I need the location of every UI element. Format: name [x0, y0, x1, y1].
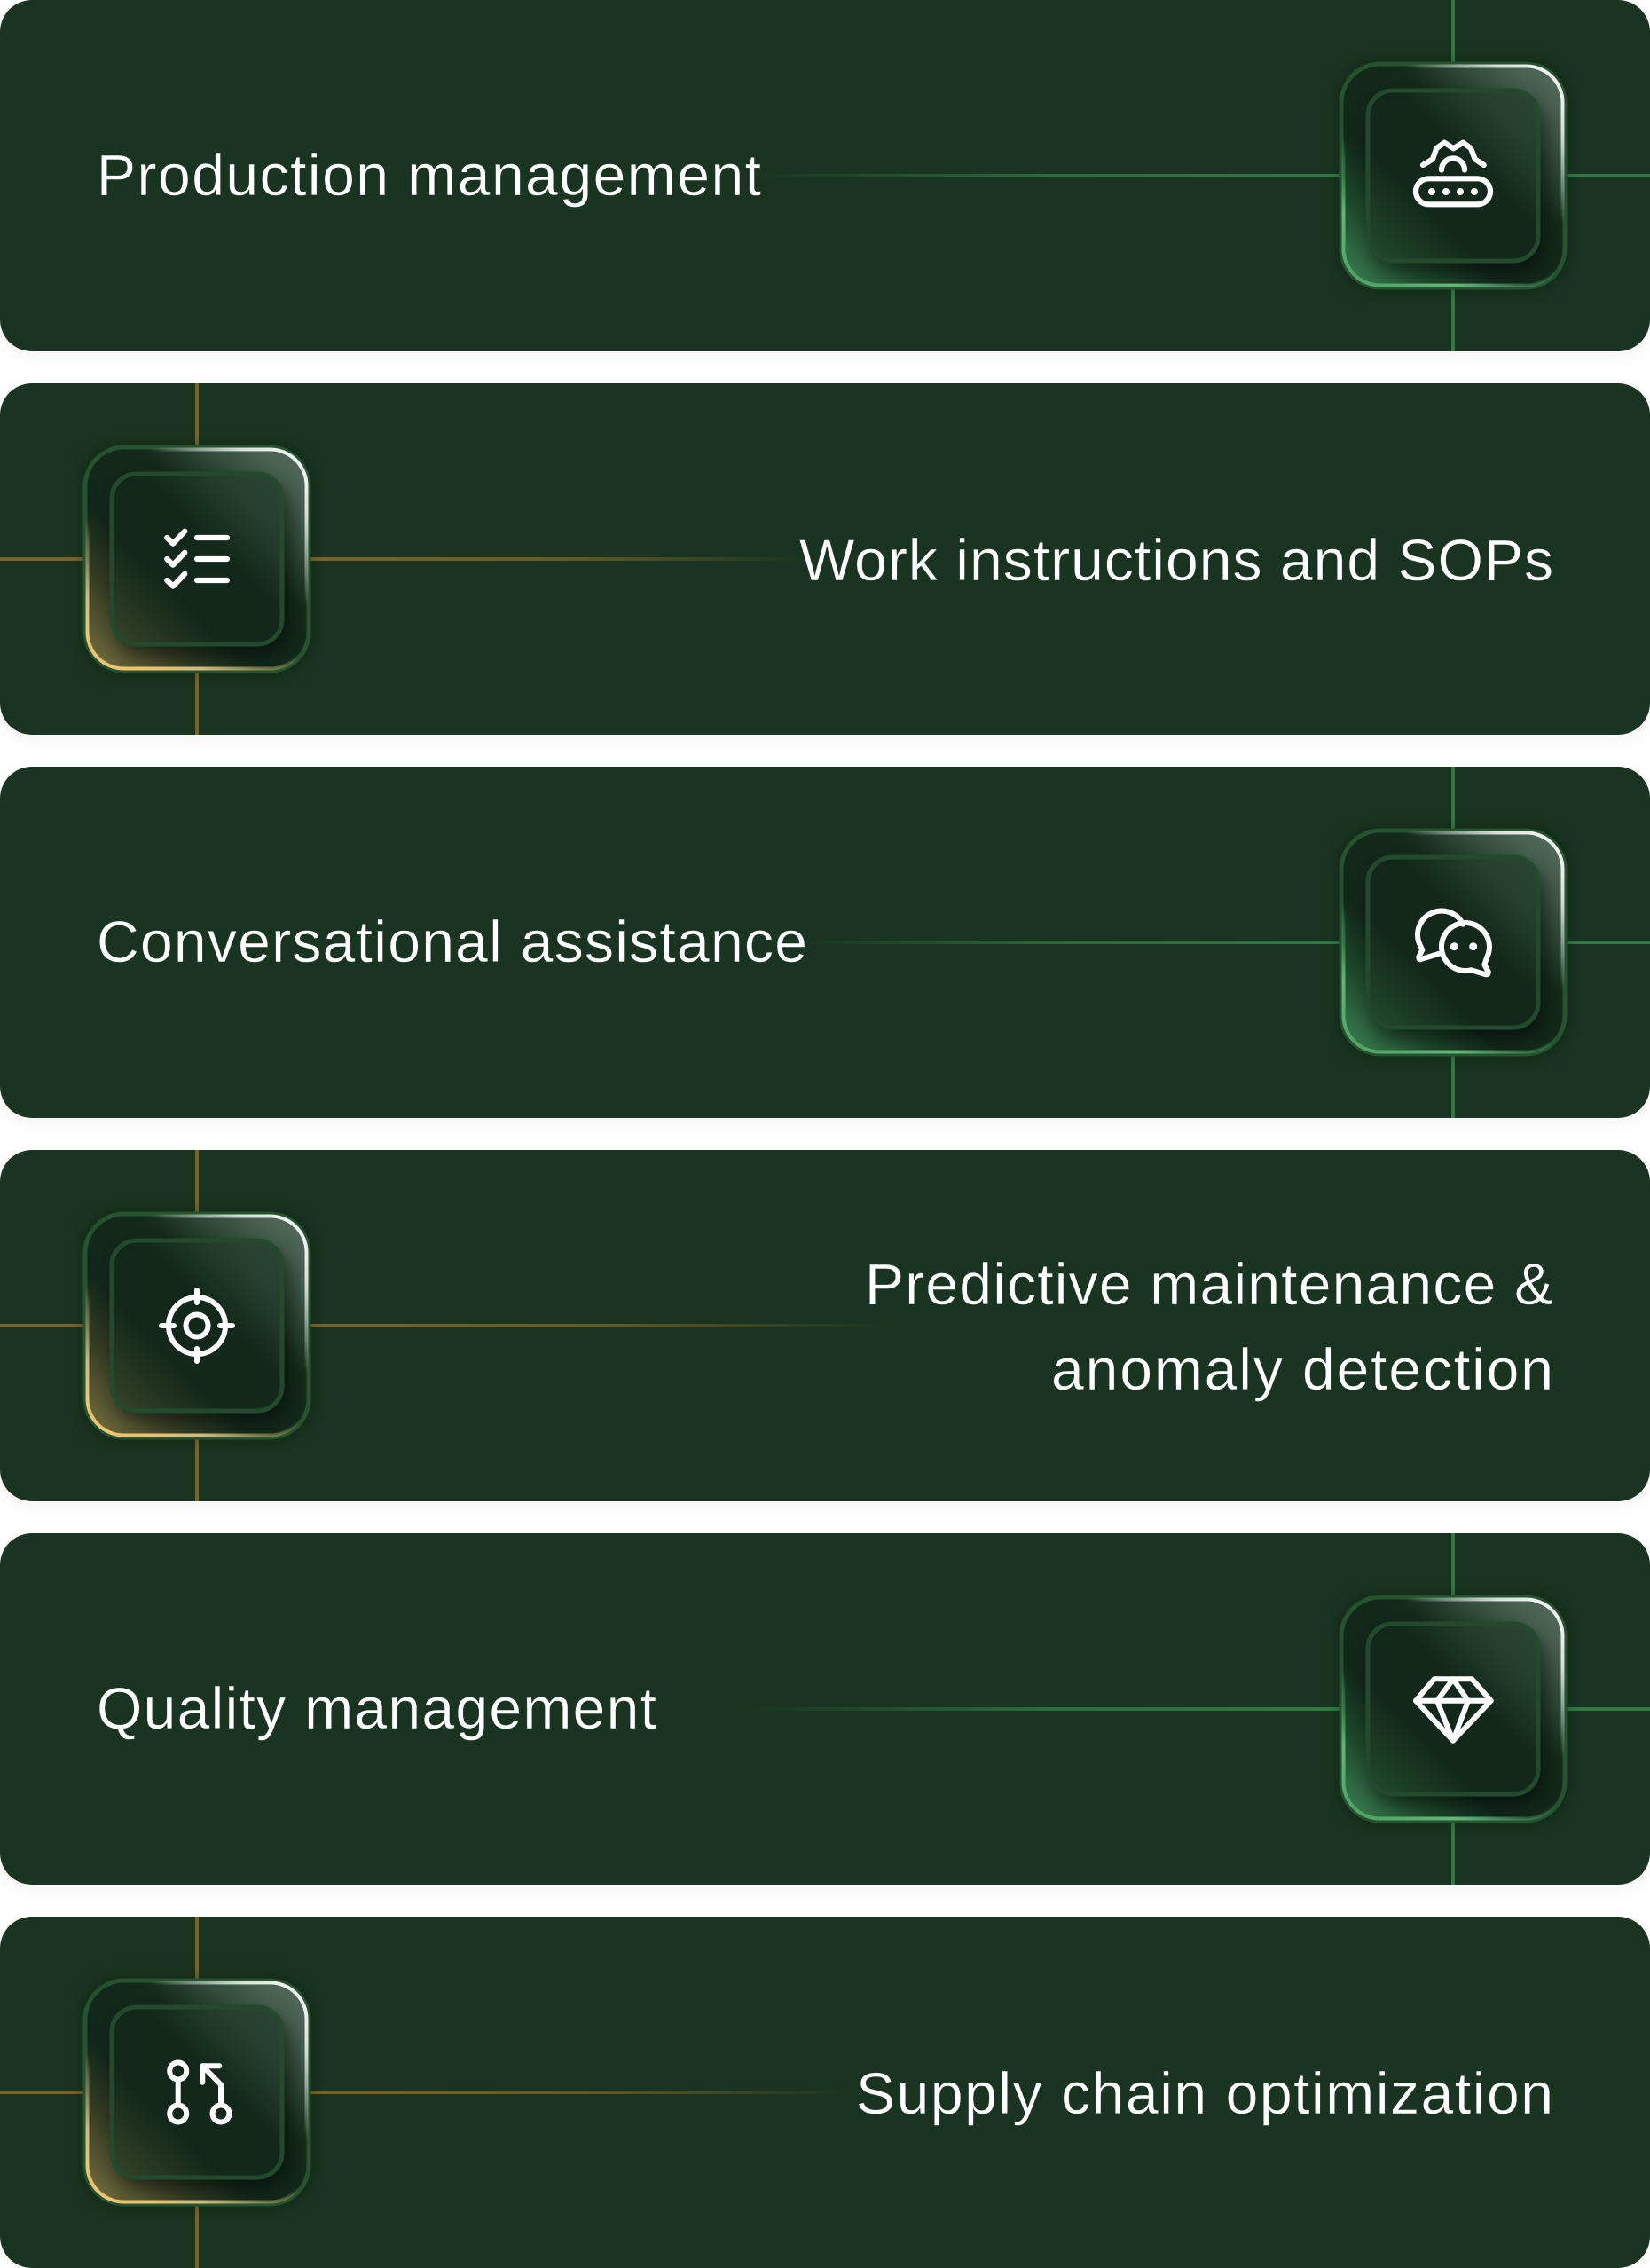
panel: work instructions and SOPs: [0, 383, 1650, 738]
heading: supply chain optimization: Supply chain optimization: [856, 2060, 1553, 2126]
heading: production management: Production management: [97, 142, 761, 208]
heading: conversational assistance: Conversational assistance: [97, 909, 807, 974]
connector lines: [798, 767, 1650, 1118]
glass icon tile: [83, 1979, 310, 2206]
connector lines: [0, 1917, 852, 2268]
connector lines: [745, 0, 1650, 351]
icon: conveyor belt with gear: [1416, 143, 1490, 204]
panel: production management: [0, 0, 1650, 355]
heading: quality management: Quality management: [97, 1675, 656, 1741]
connector lines: [745, 1533, 1650, 1885]
glass icon tile: [1340, 62, 1567, 289]
heading: work instructions and SOPs: Work instructions and SOPs: [799, 527, 1553, 593]
panel: quality management: [0, 1533, 1650, 1888]
icon: target crosshair: [161, 1290, 232, 1361]
heading: predictive maintenance and anomaly detection: anomaly detection: [1051, 1336, 1553, 1402]
glass icon tile: [1340, 1595, 1567, 1823]
connector lines: [0, 383, 807, 735]
panel: supply chain optimization: [0, 1917, 1650, 2268]
panel: conversational assistance: [0, 767, 1650, 1122]
glass icon tile: [83, 445, 310, 673]
icon: chat bubbles: [1418, 911, 1489, 974]
connector lines: [0, 1150, 887, 1501]
icon: checklist: [167, 532, 227, 587]
panel: predictive maintenance and anomaly detection: [0, 1150, 1650, 1505]
icon: diamond: [1416, 1679, 1491, 1741]
glass icon tile: [1340, 829, 1567, 1056]
heading: predictive maintenance and anomaly detection: [865, 1251, 1553, 1402]
glass icon tile: [83, 1212, 310, 1439]
heading: predictive maintenance and anomaly detection: Predictive maintenance &: [865, 1251, 1553, 1317]
icon: process branches: [169, 2062, 229, 2122]
